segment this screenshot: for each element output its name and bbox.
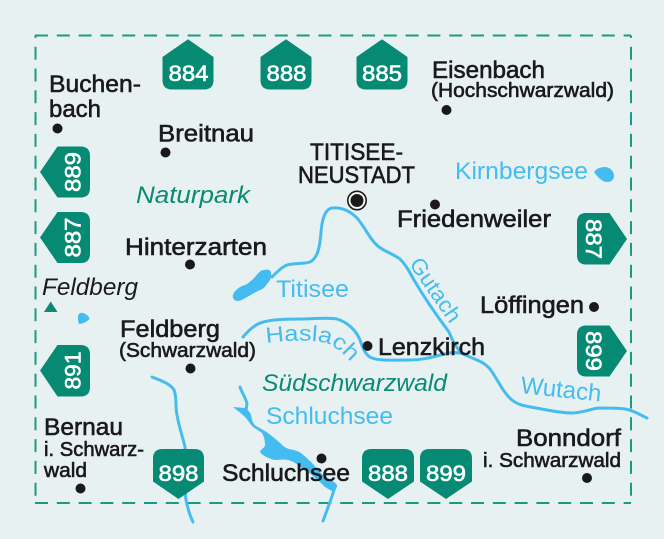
path: Haslach label baseline <box>266 341 350 361</box>
label: Titisee-Neustadt: TITISEE- <box>310 139 403 166</box>
town dot: Feldberg <box>186 364 196 374</box>
label: Löffingen: Löffingen <box>480 292 584 319</box>
label: Hinterzarten: Hinterzarten <box>125 234 267 261</box>
label: Feldberg (Schwarzwald) <box>119 316 256 362</box>
badge: 884 <box>162 39 214 90</box>
label: Schluchsee town: Schluchsee <box>222 460 350 487</box>
river: Haslach <box>243 318 465 360</box>
label: Breitnau: Breitnau <box>158 120 254 148</box>
label: Gutach: Gutach <box>412 258 458 324</box>
badge: 898: 898 <box>158 461 198 486</box>
icon: Feldberg summit triangle <box>44 302 58 312</box>
river: Gutach and Wutach <box>272 208 647 418</box>
label: Kirnbergsee: Kirnbergsee <box>455 158 588 185</box>
river: left stream <box>152 377 193 522</box>
label: Lenzkirch: Lenzkirch <box>378 334 485 361</box>
label: Feldberg summit: Feldberg <box>42 274 139 301</box>
lake: Schluchsee <box>233 407 337 492</box>
badge: 887 left <box>40 212 90 263</box>
badge: 888 bottom <box>362 449 414 499</box>
badge: 899 right: 899 <box>581 331 606 371</box>
label: Schluchsee lake: Schluchsee <box>266 403 393 430</box>
label: Eisenbach <box>431 57 614 102</box>
label: Naturpark: Naturpark <box>136 182 252 209</box>
label: Bernau: wald <box>43 459 87 482</box>
label: Bonndorf: i. Schwarzwald <box>483 449 621 472</box>
badge: 891 left: 891 <box>60 352 86 390</box>
label: Titisee-Neustadt: NEUSTADT <box>298 162 415 189</box>
label: Buchenbach <box>49 71 141 123</box>
label: Eisenbach: (Hochschwarzwald) <box>431 79 614 102</box>
dashed map boundary <box>35 36 631 503</box>
town dot: Hinterzarten <box>185 260 195 270</box>
town dot: Friedenweiler <box>430 200 440 210</box>
badge: 887 right: 887 <box>581 219 606 259</box>
label: Bernau <box>43 414 144 482</box>
label: Buchenbach: bach <box>49 96 101 123</box>
label: Titisee-Neustadt <box>298 139 415 189</box>
badge: 889 left: 889 <box>60 152 86 192</box>
label: Bernau: i. Schwarz- <box>44 438 144 461</box>
town dot: Breitnau <box>160 148 170 158</box>
lake: Kirnbergsee <box>594 167 614 182</box>
badge: 884: 884 <box>168 61 208 86</box>
label: Feldberg (Schwarzwald): Feldberg <box>120 316 220 343</box>
badge: 887 right <box>577 213 627 264</box>
town dot: Bonndorf <box>582 473 592 483</box>
stream: Schluchsee outflow <box>323 490 334 521</box>
badge: 887 left: 887 <box>60 218 86 258</box>
badge: 888 bottom: 888 <box>368 461 408 486</box>
path: Gutach label baseline <box>409 264 450 324</box>
badge: 899 bottom <box>420 449 472 499</box>
badge: 885 <box>356 39 408 90</box>
label: Eisenbach: Eisenbach <box>432 57 545 84</box>
lake: Titisee <box>233 270 271 301</box>
town marker: Titisee-Neustadt <box>348 191 366 210</box>
badge: 888 top <box>260 39 312 90</box>
badge: 899 bottom: 899 <box>426 461 466 486</box>
badge: 885: 885 <box>362 61 402 86</box>
badge: 889 left <box>40 146 90 198</box>
town dot: Buchenbach <box>52 124 62 134</box>
label: Friedenweiler: Friedenweiler <box>397 206 551 233</box>
label: Wutach: Wutach <box>519 372 603 407</box>
label: Buchenbach: Buchen- <box>49 71 141 98</box>
label: Südschwarzwald: Südschwarzwald <box>262 370 448 397</box>
label: Bonndorf: Bonndorf <box>516 425 621 452</box>
town dot: Löffingen <box>589 302 599 312</box>
badge: 898 <box>153 449 204 499</box>
badge: 891 left <box>40 345 90 396</box>
label: Bonndorf <box>483 425 621 472</box>
town dot: Bernau <box>76 484 86 494</box>
label: Bernau: Bernau <box>44 414 123 441</box>
label: Titisee: Titisee <box>276 276 349 303</box>
town dot: Lenzkirch <box>362 341 372 351</box>
badge: 888 top: 888 <box>266 61 306 86</box>
stream: Schluchsee inflow <box>240 387 247 410</box>
label: Feldberg (Schwarzwald): (Schwarzwald) <box>119 339 256 362</box>
town dot: Eisenbach <box>442 105 452 115</box>
lake: Feldsee <box>78 313 90 324</box>
town dot: Schluchsee <box>316 454 326 464</box>
badge: 899 right <box>577 326 627 376</box>
label: Haslach: Haslach <box>266 325 357 361</box>
